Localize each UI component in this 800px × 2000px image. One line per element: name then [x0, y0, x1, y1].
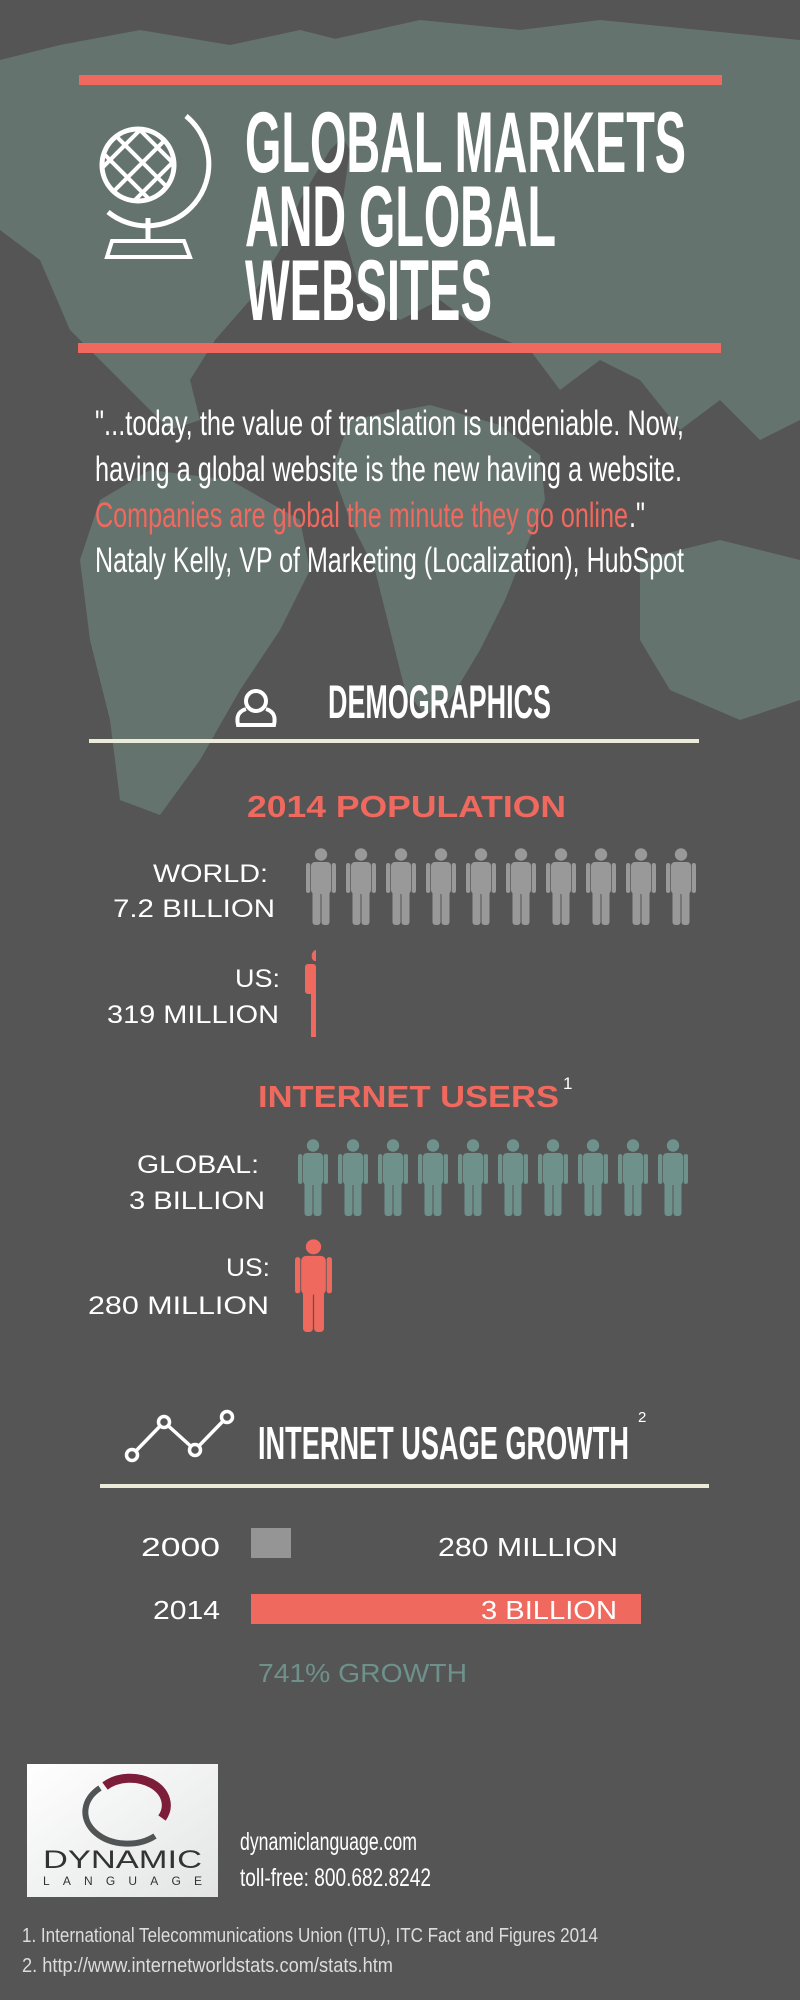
background: world map	[0, 20, 800, 815]
pictogram: red person	[295, 1239, 332, 1332]
pictogram: 10 teal people	[298, 1139, 688, 1216]
footnotes: 2. http://www.internetworldstats.com/stats.htm	[22, 1955, 393, 1977]
heading: internet usage growth	[100, 1409, 709, 1488]
heading: internet users: 1	[563, 1074, 572, 1093]
bar chart: growth: 2014	[153, 1595, 220, 1625]
row: world population: WORLD:	[153, 860, 268, 888]
footnotes	[22, 1925, 598, 1977]
quote: ."	[629, 496, 645, 535]
heading: internet users: INTERNET USERS	[258, 1079, 559, 1114]
bar chart: growth: 3 BILLION	[481, 1595, 617, 1625]
pictogram: partial red person	[305, 950, 316, 1037]
row: global internet users: 3 BILLION	[129, 1187, 265, 1215]
bar chart: growth: 280 MILLION	[438, 1532, 618, 1562]
title text: WEBSITES	[245, 243, 492, 339]
row: US internet users: US:	[226, 1254, 270, 1282]
title text	[245, 95, 686, 339]
logo: dynamic language: LANGUAGE	[43, 1874, 202, 1888]
row: world population	[113, 848, 696, 925]
icon: line chart	[126, 1412, 232, 1460]
row: global internet users	[129, 1139, 688, 1216]
quote	[95, 404, 684, 580]
row: US population: US:	[235, 965, 280, 993]
bar chart: growth: 741% GROWTH	[258, 1658, 467, 1688]
row: US internet users	[88, 1239, 332, 1332]
row: world population: 7.2 BILLION	[113, 895, 275, 923]
footnotes: 1. International Telecommunications Union (ITU), ITC Fact and Figures 2014	[22, 1925, 598, 1947]
contact text: toll-free: 800.682.8242	[240, 1864, 431, 1892]
header: title block	[78, 75, 722, 353]
row: US population: 319 MILLION	[107, 1001, 279, 1029]
logo: dynamic language	[27, 1764, 218, 1897]
icon: person outline	[237, 691, 275, 725]
row: US population	[107, 950, 316, 1037]
heading: demographics	[89, 675, 699, 743]
row: US internet users: 280 MILLION	[88, 1292, 269, 1320]
icon: globe	[100, 114, 212, 259]
heading: demographics: DEMOGRAPHICS	[328, 675, 551, 728]
contact text	[240, 1828, 431, 1892]
pictogram: 10 gray people	[306, 848, 696, 925]
logo: dynamic language: DYNAMIC	[43, 1846, 202, 1874]
row: global internet users: GLOBAL:	[137, 1151, 259, 1179]
bar chart: growth: 2000	[141, 1532, 220, 1562]
heading: internet usage growth: 2	[638, 1409, 646, 1426]
heading: 2014 population: 2014 POPULATION	[247, 789, 566, 824]
bar chart: growth	[141, 1528, 641, 1688]
contact text: dynamiclanguage.com	[240, 1828, 417, 1856]
